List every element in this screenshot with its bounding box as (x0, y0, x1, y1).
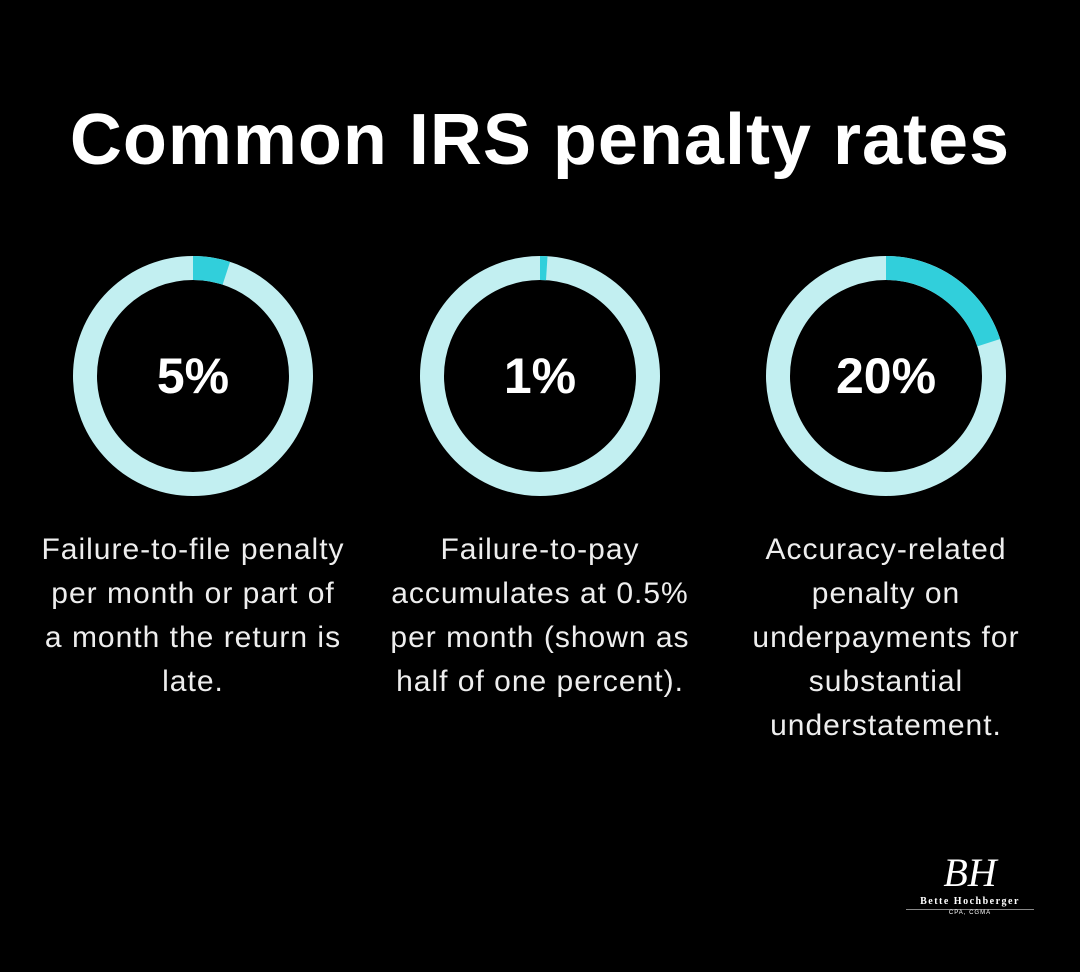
donut: 1%: 1% (504, 348, 576, 404)
caption: 1%: Failure-to-pay (440, 533, 640, 566)
caption: 1%: accumulates at 0.5% (391, 577, 689, 610)
logo: Bette Hochberger (920, 896, 1020, 907)
logo: CPA, CGMA (949, 910, 991, 916)
donut: 20%: 20% (836, 348, 936, 404)
logo (906, 850, 1034, 916)
caption: 20%: substantial (809, 665, 963, 698)
caption: 20%: understatement. (770, 709, 1002, 742)
caption: 20%: penalty on (812, 577, 960, 610)
donut: 20% (766, 256, 1006, 496)
donut: 5%: 5% (157, 348, 229, 404)
caption: 1% (390, 533, 690, 698)
caption: 20% (752, 533, 1020, 742)
donut: 5% (73, 256, 313, 496)
caption: 5%: late. (162, 665, 224, 698)
caption: 1%: per month (shown as (390, 621, 690, 654)
caption: 1%: half of one percent). (396, 665, 684, 698)
caption: 5%: Failure-to-file penalty (41, 533, 345, 566)
caption: 20%: underpayments for (752, 621, 1020, 654)
donut: 1% (420, 256, 660, 496)
caption: 5% (41, 533, 345, 698)
caption: 5%: a month the return is (45, 621, 341, 654)
title: Common IRS penalty rates (70, 100, 1010, 180)
caption: 5%: per month or part of (51, 577, 335, 610)
caption: 20%: Accuracy-related (765, 533, 1007, 566)
logo: BH (943, 850, 997, 895)
